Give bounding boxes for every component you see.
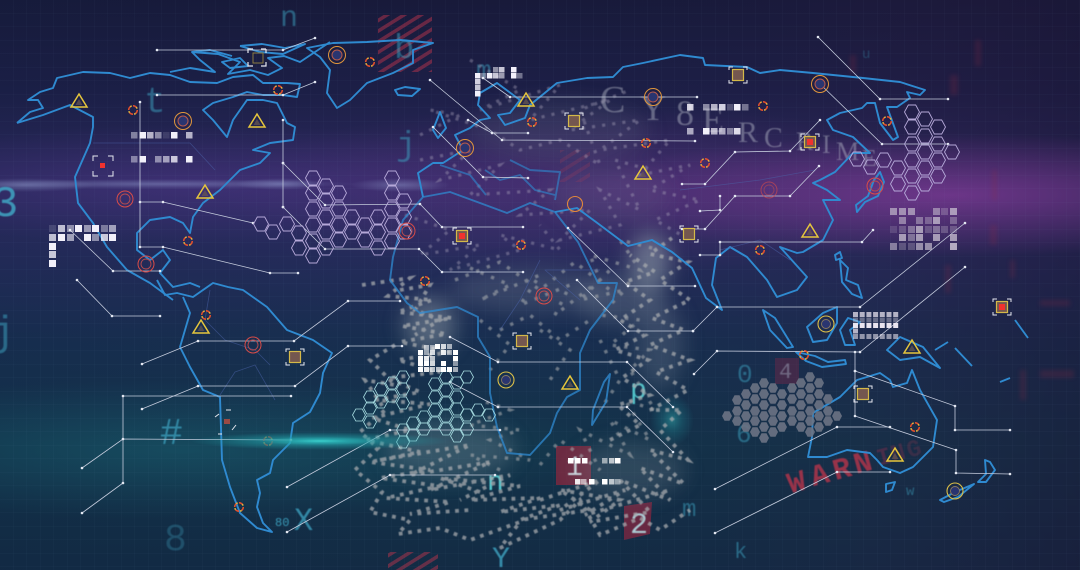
floating code characters: k [734,540,747,565]
hatched and red background blocks [378,15,1074,570]
icons: warning triangles [71,93,920,461]
Africa [390,192,617,455]
cybercrime text: C [600,79,625,121]
floating code characters: n [487,468,504,499]
warning text: W [784,466,810,503]
pixel bars: Central Asia [687,104,748,134]
pixel block: Arctic L shape [475,67,522,96]
floating code characters: p [630,376,647,407]
pixel bars: North America [131,132,192,162]
pixel matrix: Southeast Asia [853,314,899,336]
hexagon cluster: North Atlantic [254,171,412,263]
floating code characters: 2 [630,509,648,543]
floating code characters: 1 [566,453,583,484]
floating code characters: 80 [275,516,289,530]
particle cloud over Africa and Eurasia [355,60,700,548]
warning text: A [807,458,833,496]
warning text: R [829,452,855,490]
cybercrime text: C [764,123,783,154]
continent: South America [157,280,332,532]
floating code characters: m [476,56,492,86]
cybercrime text: 8 [676,93,694,133]
hexagon cluster: South Atlantic [352,371,496,448]
pixel bars: southern Africa [568,458,620,484]
connector lines [70,37,1010,533]
cybercrime text: E [702,100,724,140]
Europe and Asia [418,55,925,310]
canadian arctic islands [170,42,330,75]
icons: small dashed ring markers [129,58,919,511]
warning text: N [888,440,909,469]
cybercrime text: R [796,127,814,156]
floating code characters: b [394,31,414,69]
floating code characters: u [862,47,870,63]
floating code characters: 8 [164,519,187,562]
warning text: I [874,444,895,473]
floating code characters: j [396,128,416,166]
floating code characters: w [906,484,915,500]
Mediterranean details [440,160,560,200]
New Zealand [940,484,974,502]
glow: teal light streak [190,432,450,450]
icons: concentric circle markers [117,46,963,499]
warning text: G [904,436,925,465]
cybercrime text: Y [640,88,666,128]
cybercrime text: E [862,146,877,172]
floating code characters: 0 [737,360,753,390]
warning text [784,436,925,503]
cybercrime text: R [738,116,758,149]
cybercrime text [600,79,877,172]
cybercrime text: M [836,137,859,166]
pixel matrix: Africa [418,344,458,372]
floating code characters: 4 [779,360,792,385]
floating code characters: # [160,413,183,456]
Japan and Pacific islands [856,172,884,212]
floating code characters: m [682,497,696,524]
filled hexagon cluster: Indian Ocean [722,372,842,443]
icons: square target markers [93,49,1011,434]
hexagon cluster: East Asia [850,105,960,200]
pixel matrix: Sea of Japan grey [890,208,957,250]
floating code characters: X [294,503,313,540]
continent: Greenland [307,40,433,108]
floating code characters: n [280,2,298,36]
interior borders [93,143,815,400]
continent: North America [17,72,300,300]
cybercrime text: I [822,130,831,159]
pixel block: Pacific L shape [49,225,116,267]
floating code characters: t [144,82,166,123]
warning text: N [850,446,876,484]
Australia [808,370,937,473]
floating code characters: 6 [736,420,752,450]
Southeast Asia islands [763,310,793,348]
